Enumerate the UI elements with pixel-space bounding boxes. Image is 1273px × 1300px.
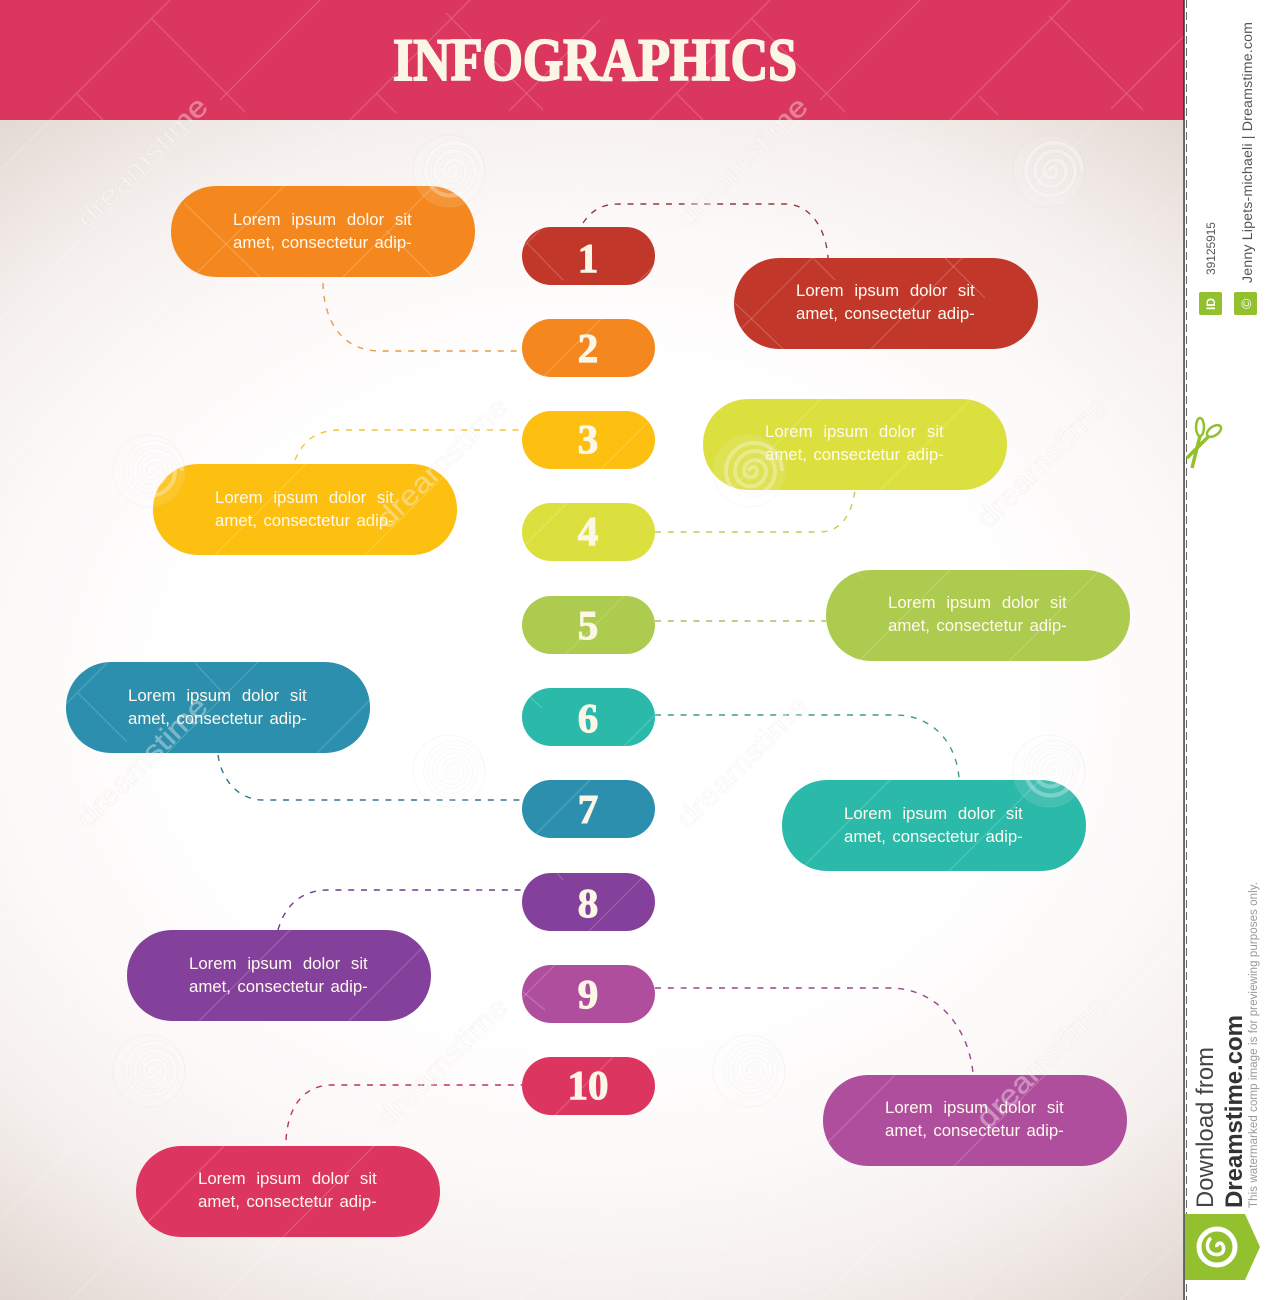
icon: scissors xyxy=(1187,418,1223,468)
number pill 1: 1 xyxy=(578,235,598,281)
text pill 4: Lorem ipsum dolor sit xyxy=(765,422,944,441)
download from: Download from xyxy=(1192,1047,1219,1208)
text pill 6: Lorem ipsum dolor sit xyxy=(844,804,1023,823)
number pill 5 xyxy=(522,596,655,654)
watermark text: dreamstime xyxy=(370,391,515,535)
text pill 5 xyxy=(826,570,1130,661)
number pill 2 xyxy=(522,319,655,377)
number pill 10: 10 xyxy=(568,1062,608,1108)
icon: ID badge: ID xyxy=(1204,298,1218,310)
text pill 3 xyxy=(153,464,457,555)
connector 1 xyxy=(583,204,828,258)
text pill 8 xyxy=(127,930,431,1021)
text pill 10 xyxy=(136,1146,440,1237)
number pill 6 xyxy=(522,688,655,746)
text pill 7: amet, consectetur adip- xyxy=(128,709,307,728)
watermark text: dreamstime xyxy=(370,991,515,1135)
watermark text: dreamstime xyxy=(670,691,815,835)
text pill 3: amet, consectetur adip- xyxy=(215,511,394,530)
connector 10 xyxy=(286,1085,522,1140)
text pill 1: Lorem ipsum dolor sit xyxy=(796,281,975,300)
connector 6 xyxy=(655,715,959,778)
preview note: This watermarked comp image is for previewing purposes only. xyxy=(1248,882,1260,1208)
number pill 4 xyxy=(522,503,655,561)
sidebar divider xyxy=(1183,0,1186,1300)
text pill 2: amet, consectetur adip- xyxy=(233,233,412,252)
text pill 9: Lorem ipsum dolor sit xyxy=(885,1098,1064,1117)
text pill 8: Lorem ipsum dolor sit xyxy=(189,954,368,973)
dreamstime brand: Dreamstime.com xyxy=(1221,1015,1248,1208)
connector 7 xyxy=(218,755,522,800)
connector 2 xyxy=(323,283,522,351)
number pill 9: 9 xyxy=(578,971,598,1017)
text pill 5: amet, consectetur adip- xyxy=(888,616,1067,635)
text pill 6: amet, consectetur adip- xyxy=(844,827,1023,846)
number pill 8 xyxy=(522,873,655,931)
title: INFOGRAPHICS xyxy=(393,27,797,93)
connector 3 xyxy=(295,430,522,460)
text pill 2 xyxy=(171,186,475,277)
number pill 3 xyxy=(522,411,655,469)
header banner xyxy=(0,0,1184,120)
watermark text: dreamstime xyxy=(970,991,1115,1135)
text pill 2: Lorem ipsum dolor sit xyxy=(233,210,412,229)
number pill 2: 2 xyxy=(578,325,598,371)
connector 5 xyxy=(655,620,826,622)
image id: 39125915 xyxy=(1204,222,1218,275)
text pill 9: amet, consectetur adip- xyxy=(885,1121,1064,1140)
text pill 3: Lorem ipsum dolor sit xyxy=(215,488,394,507)
text pill 8: amet, consectetur adip- xyxy=(189,977,368,996)
text pill 10: Lorem ipsum dolor sit xyxy=(198,1169,377,1188)
icon: copyright badge xyxy=(1234,292,1257,315)
watermark text: dreamstime xyxy=(70,691,215,835)
logo badge xyxy=(1185,1214,1260,1280)
number pill 9 xyxy=(522,965,655,1023)
watermark text: dreamstime xyxy=(70,91,215,235)
watermark spirals xyxy=(113,135,1085,1107)
connector 8 xyxy=(278,890,522,930)
text pill 9 xyxy=(823,1075,1127,1166)
number pill 10 xyxy=(522,1057,655,1115)
text pill 7 xyxy=(66,662,370,753)
number pill 6: 6 xyxy=(578,695,598,741)
watermark text: dreamstime xyxy=(670,91,815,235)
text pill 10: amet, consectetur adip- xyxy=(198,1192,377,1211)
icon: ID badge xyxy=(1199,292,1222,315)
number pill 3: 3 xyxy=(578,416,598,462)
number pill 4: 4 xyxy=(578,508,598,554)
author credit: Jenny Lipets-michaeli | Dreamstime.com xyxy=(1240,22,1256,283)
number pill 5: 5 xyxy=(578,602,598,648)
number pill 7 xyxy=(522,780,655,838)
text pill 5: Lorem ipsum dolor sit xyxy=(888,593,1067,612)
number pill 1 xyxy=(522,227,655,285)
connector 4 xyxy=(655,490,855,532)
number pill 7: 7 xyxy=(578,786,598,832)
text pill 4 xyxy=(703,399,1007,490)
text pill 7: Lorem ipsum dolor sit xyxy=(128,686,307,705)
icon: copyright badge: © xyxy=(1238,298,1254,309)
number pill 8: 8 xyxy=(578,880,598,926)
watermark text xyxy=(70,91,1115,1135)
connector 9 xyxy=(655,988,973,1073)
text pill 4: amet, consectetur adip- xyxy=(765,445,944,464)
watermark text: dreamstime xyxy=(970,391,1115,535)
text pill 1: amet, consectetur adip- xyxy=(796,304,975,323)
text pill 1 xyxy=(734,258,1038,349)
text pill 6 xyxy=(782,780,1086,871)
